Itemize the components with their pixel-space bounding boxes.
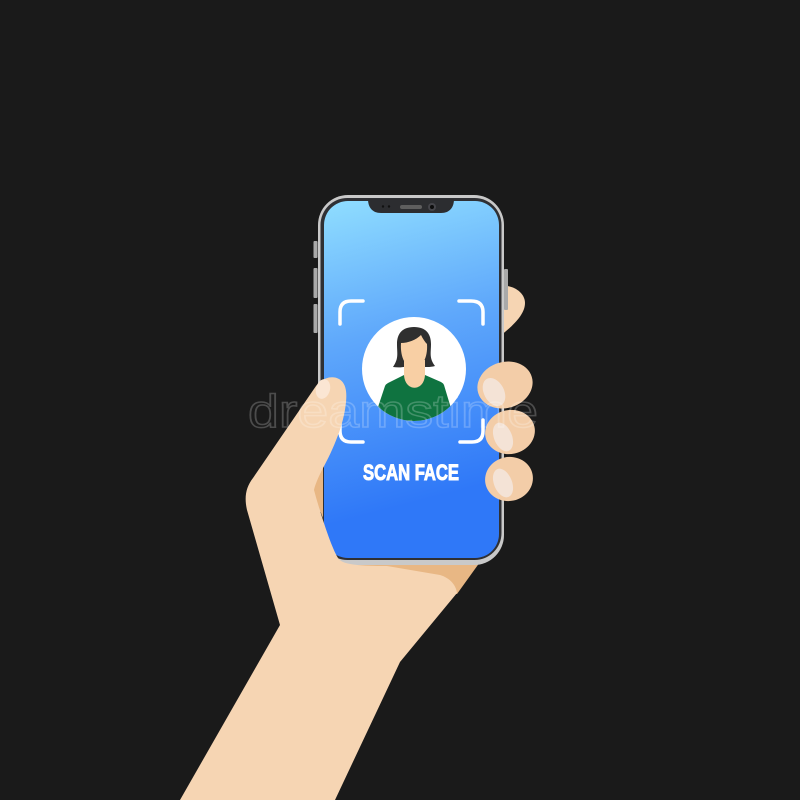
shirt <box>378 375 450 421</box>
face <box>400 335 428 361</box>
neck <box>404 360 425 388</box>
hand <box>180 377 457 800</box>
finger: index <box>471 355 539 415</box>
hair <box>393 327 435 367</box>
notch <box>368 199 454 213</box>
screen <box>324 201 499 558</box>
side buttons <box>314 241 508 333</box>
palm shadow behind phone <box>330 540 480 594</box>
watermark: dreamstime <box>248 385 538 437</box>
avatar <box>362 317 466 425</box>
phone <box>314 195 508 565</box>
phone bezel <box>320 198 502 560</box>
phone frame <box>318 195 504 565</box>
finger: ring <box>481 452 537 506</box>
illustration: hand holding phone scanning face <box>180 195 536 800</box>
thumb nail <box>314 378 332 400</box>
finger: middle <box>481 405 539 459</box>
label: scan face: SCAN FACE <box>363 460 459 485</box>
finger behind phone <box>500 286 525 336</box>
palm shadow over phone edge <box>312 466 323 518</box>
scan frame brackets <box>340 301 483 442</box>
